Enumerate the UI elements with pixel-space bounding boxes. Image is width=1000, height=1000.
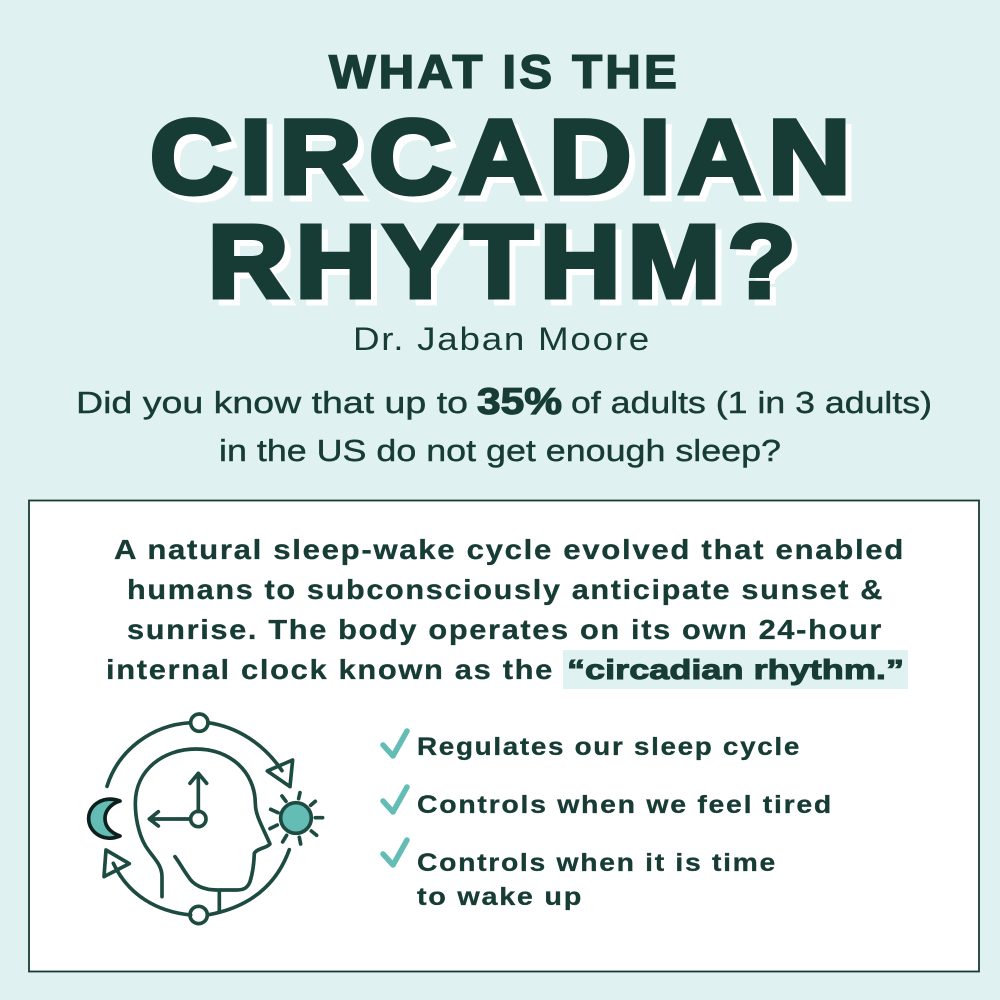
check item 2: Controls when we feel tired [417, 791, 833, 819]
check item 3 [383, 840, 777, 911]
explanation text: internal clock known as the [106, 654, 554, 685]
check item 1: Regulates our sleep cycle [417, 733, 801, 761]
icon: sun [270, 793, 323, 844]
checklist [383, 731, 833, 911]
intro text: of adults (1 in 3 adults) [571, 385, 932, 420]
highlight: circadian rhythm [563, 650, 908, 689]
cycle top node [191, 714, 208, 731]
arrowhead bottom left [104, 850, 129, 877]
clock hands [149, 773, 207, 826]
panel: explanation [29, 500, 979, 972]
cycle bottom node [190, 906, 207, 924]
intro text [76, 381, 932, 468]
intro text: Did you know that up to [76, 385, 468, 420]
intro text: 35% [477, 381, 562, 422]
check item 3: Controls when it is time [417, 849, 777, 877]
explanation text: humans to subconsciously anticipate sunset & [127, 574, 884, 605]
outer cycle arcs [107, 723, 289, 915]
explanation text: “circadian rhythm.” [567, 654, 904, 685]
title: rhythm: RHYTHM? [208, 204, 803, 319]
check item 3: to wake up [417, 883, 583, 911]
heading: what is the: WHAT IS THE [329, 45, 680, 98]
intro text: in the US do not get enough sleep? [219, 433, 781, 468]
icon: head clock cycle [89, 714, 323, 924]
head outline [135, 749, 270, 912]
title: rhythm: RHYTHM? [214, 210, 809, 325]
clock centre [191, 811, 206, 827]
arrowhead top right [267, 760, 293, 787]
explanation text: sunrise. The body operates on its own 24-hour [127, 614, 883, 645]
author: Dr. Jaban Moore [353, 321, 651, 357]
icon: moon [89, 799, 120, 838]
explanation text: A natural sleep-wake cycle evolved that enabled [114, 534, 905, 565]
explanation text [106, 534, 905, 685]
title: circadian: CIRCADIAN [150, 99, 858, 216]
title: circadian: CIRCADIAN [156, 105, 864, 222]
